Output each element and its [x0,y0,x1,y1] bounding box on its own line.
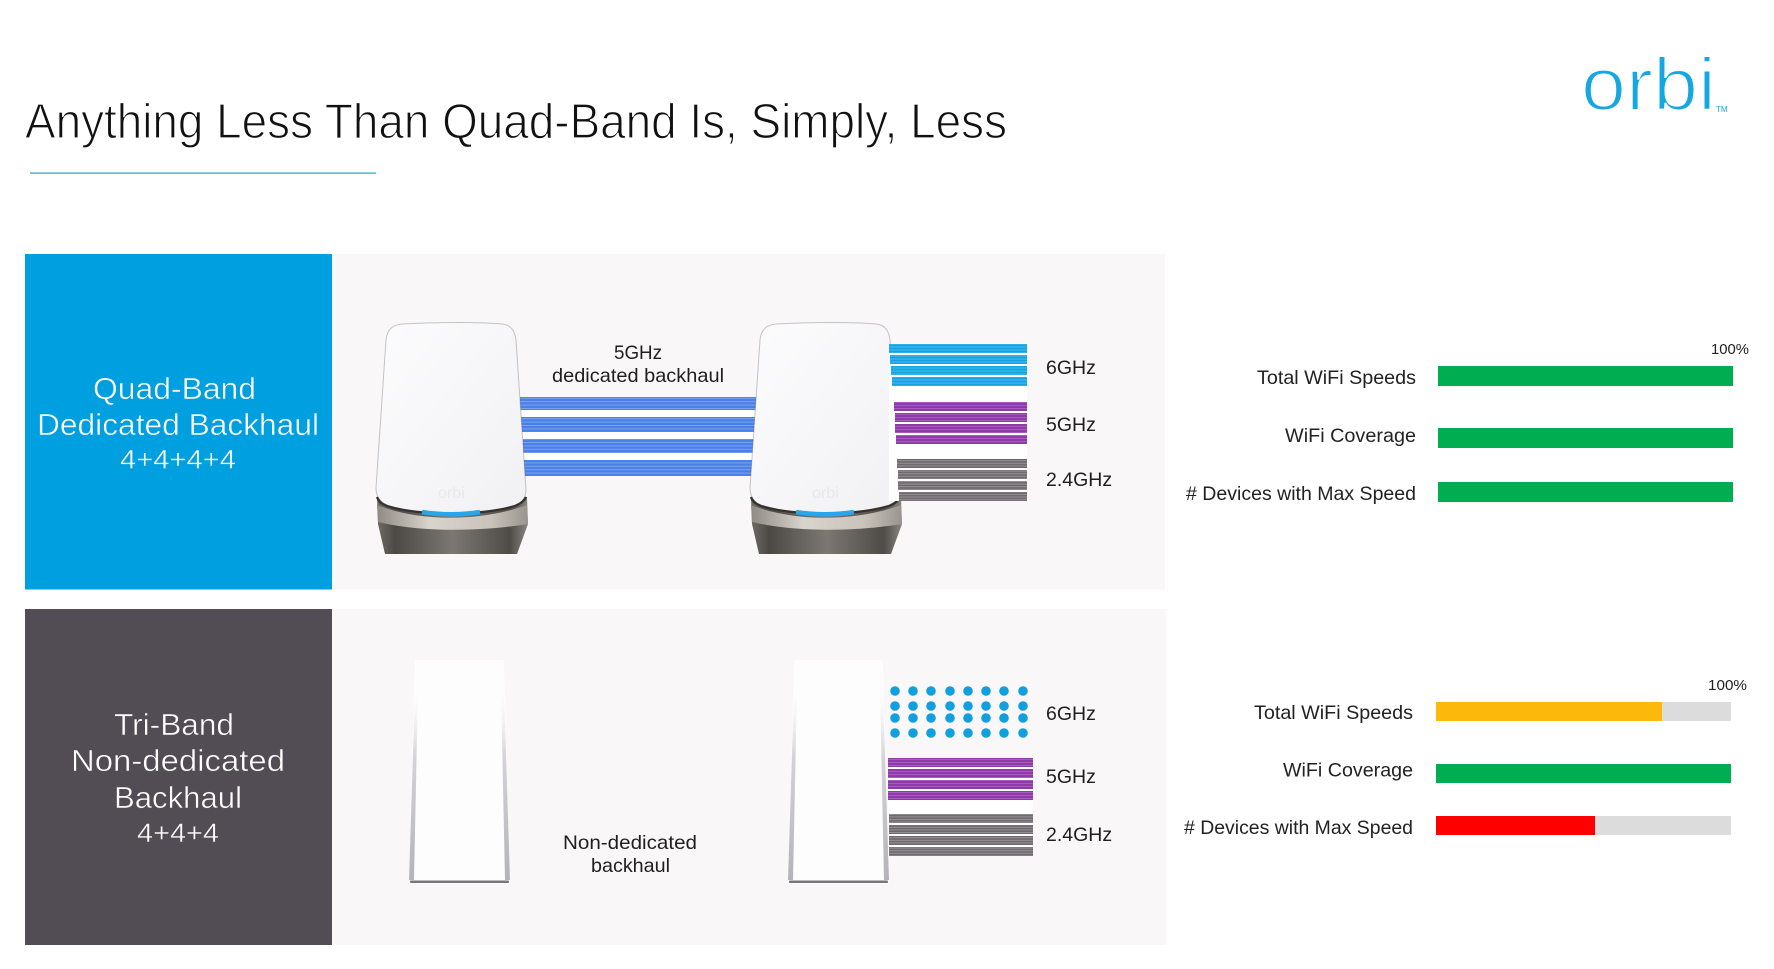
backhaul label: dedicated backhaul [552,365,724,387]
backhaul label: 5GHz [614,342,662,364]
backhaul lines [520,397,758,476]
backhaul label: backhaul [591,855,670,877]
panel: tri-band [25,609,1166,945]
band labels: 6GHz [1046,703,1096,725]
client bands: 5GHz 2.4GHz [888,758,1033,856]
bar chart: quad-band [1186,341,1749,505]
backhaul label [552,342,724,387]
router watermarks: orbi [438,485,465,502]
panel: quad-band [25,254,1165,590]
logo: orbi: orbi [1581,43,1716,126]
label block: quad-band dedicated backhaul: Quad-Band [93,371,256,406]
band labels: 6GHz [1046,357,1096,379]
bar chart: quad-band: Total WiFi Speeds [1257,367,1416,389]
band labels [1046,703,1112,846]
bar chart: tri-band: Total WiFi Speeds [1254,702,1413,724]
label block: quad-band dedicated backhaul: Dedicated Backhaul [37,407,319,442]
client 6GHz dots [890,686,1028,738]
label block: quad-band dedicated backhaul: 4+4+4+4 [120,444,236,474]
label block: quad-band dedicated backhaul [25,254,332,590]
band labels: 2.4GHz [1046,824,1112,846]
band labels: 5GHz [1046,414,1096,436]
bar chart: tri-band [1184,677,1747,839]
client bands: 6GHz 5GHz 2.4GHz [889,344,1027,501]
bar chart: tri-band: 100% [1708,677,1747,694]
label block: tri-band non-dedicated backhaul: Tri-Band [114,707,234,742]
backhaul label [563,832,697,877]
router right [788,660,889,884]
bar chart: quad-band: # Devices with Max Speed [1186,483,1416,505]
backhaul label: Non-dedicated [563,832,697,854]
router watermarks: orbi [812,485,839,502]
band labels: 2.4GHz [1046,469,1112,491]
router watermarks [438,485,839,502]
router left [376,322,528,554]
bar chart: quad-band: 100% [1711,341,1749,358]
label block: tri-band non-dedicated backhaul: Backhaul [114,780,242,815]
router left [409,660,510,884]
title: Anything Less Than Quad-Band Is, Simply, Less [25,95,1007,149]
band labels [1046,357,1112,491]
label block: tri-band non-dedicated backhaul [25,609,332,945]
bar chart: tri-band: # Devices with Max Speed [1184,817,1413,839]
bar chart: tri-band: WiFi Coverage [1283,760,1413,782]
logo: orbi: TM [1716,105,1728,114]
label block: tri-band non-dedicated backhaul: 4+4+4 [137,818,219,848]
label block: tri-band non-dedicated backhaul: Non-dedicated [71,743,285,778]
band labels: 5GHz [1046,766,1096,788]
bar chart: quad-band: WiFi Coverage [1285,425,1416,447]
router right [750,322,902,554]
